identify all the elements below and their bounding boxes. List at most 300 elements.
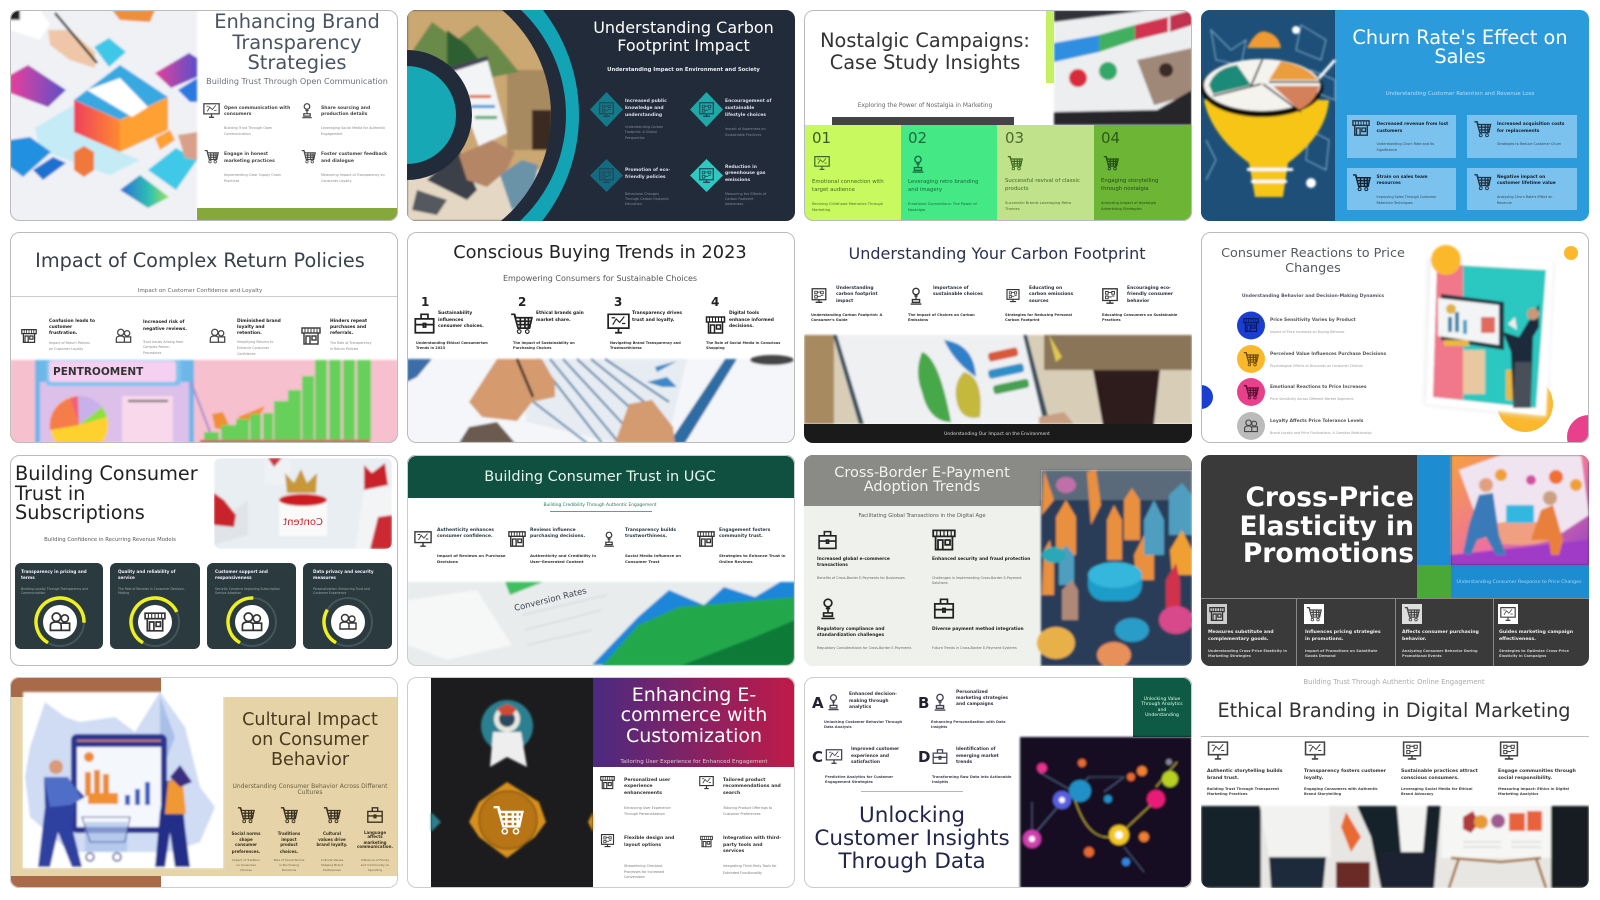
card: data privacy: Data privacy and security [313,569,374,574]
item B: marketing strategies [956,695,1008,701]
item: authenticity: consumer confidence. [437,533,493,539]
item: cultural values: Cultural [323,831,341,836]
item: tailored [700,776,781,816]
item: eco behaviour: behavior [1127,298,1150,304]
item: personalized: experience [624,783,653,789]
item: cultural values: Preferences [323,868,341,872]
title: Trust in [14,482,85,505]
image: neon data network [1020,737,1192,888]
item: sourcing: Engagement [321,132,343,136]
card: decreased revenue: Decreased revenue from lost [1376,122,1448,127]
item: regulatory: Regulatory Considerations for Cross-Border E-Payments [817,646,912,650]
panel: Churn Rate's Effect on Sales [1201,10,1589,221]
column 04 [1094,125,1192,221]
item: sustainable choices: Emissions [908,318,928,322]
column 02: Leveraging retro branding [908,179,978,185]
item: lifestyle: Encouragement of [725,99,771,104]
item: flexible [602,834,674,879]
column: campaign effectiveness: Elasticity in Campaigns [1499,654,1546,658]
title: Behavior [271,750,350,770]
item: sensitivity: Impact of Price Increases on Buying Behavior [1270,330,1345,334]
item 4: decisions. [729,323,754,329]
item: storytelling: Marketing Practices [1207,792,1247,796]
item 1: Sustainability [438,311,472,316]
card: lifetime value: Revenue [1497,201,1512,205]
card: support [207,563,296,655]
item C: Improved customer [851,747,899,752]
item: e-commerce [817,532,905,580]
item: language: marketing [363,840,387,845]
photo: crown on cylinder [214,458,392,549]
item: storytelling: brand trust. [1207,775,1239,781]
illustration: shoppers at large tablet [23,692,223,868]
item: engagement: community trust. [719,533,763,539]
item: public knowledge [590,92,667,140]
item: lifestyle [690,92,772,137]
title: Through Data [837,849,986,874]
header with title: Tailoring User Experience for Enhanced Engagement [619,759,768,765]
title: Consumer Reactions to Price [1221,246,1405,261]
column: pricing strategies: Impact of Promotions on Substitute [1305,649,1377,653]
column: substitute goods: Understanding Cross-Price Elasticity in [1208,649,1287,653]
item: flexible: Flexible design and [624,836,674,841]
title: Elasticity in [1239,511,1414,542]
item D: Insights [932,780,948,784]
item B: B [918,694,929,712]
item: payment [932,599,1024,650]
item D: trends [956,759,973,765]
item: security: Challenges in Implementing Cross-Border E-Payment [932,576,1022,580]
item: flexible: Streamlining Checkout [624,864,662,868]
item: sustainable choices: sustainable choices [933,291,983,297]
title: Footprint Impact [617,36,750,55]
item 1 [415,295,488,350]
title: Understanding Your Carbon Footprint [848,244,1146,263]
item 1: 1 [421,295,429,309]
subtitle: Building Credibility Through Authentic Engagement [544,502,657,508]
item: lifestyle: sustainable [725,105,754,111]
title: Transparency [231,31,362,54]
item: transparency: Engaging Consumers with Authentic [1304,787,1378,791]
card: transparency: Transparency in pricing and [21,569,87,574]
column: substitute goods: complementary goods. [1208,636,1269,642]
item: policies: Promotion of eco- [625,168,670,173]
item: personalized: Through Personalization [623,812,665,816]
column: purchasing behaviour: behavior. [1402,636,1427,642]
column: campaign effectiveness [1498,604,1573,658]
item: carbon footprint: Consumer's Guide [811,318,848,322]
chart photo: conversion rates [407,582,795,666]
item: payment: Diverse payment method integration [932,626,1024,632]
item B: Insights [931,725,947,729]
item: engagement: Strategies to Enhance Trust in [719,553,785,558]
item: traditions: product [280,842,298,847]
item: emissions: Awareness [725,202,743,206]
item: open communication: consumers [224,111,252,117]
chart photo: conversion rates: Conversion Rates [513,586,588,614]
item: flexible: layout options [624,842,661,848]
item C [812,746,900,784]
title: on Consumer [251,730,369,750]
item: perceived value: Perceived Value Influences Purchase Decisions [1270,351,1386,357]
item: tailored: recommendations and [723,783,781,789]
item: sustainable practices: conscious consumers. [1401,775,1459,781]
card: strain on sales [1347,168,1456,210]
header band with title [804,455,1192,506]
item: policies: Through Carbon Footprint [624,197,669,201]
item D: D [918,748,930,766]
item C: satisfaction [851,759,880,765]
title: Subscriptions [15,501,145,524]
photo: laptop in circular crop [407,10,579,221]
item: emissions sources: Educating on [1029,286,1062,291]
card: transparency [15,563,103,655]
panel: Cultural Impact on Consumer Behavior [10,677,398,888]
title: Cross-Price [1245,482,1414,513]
item: language: affects [367,834,383,839]
item: emissions sources: sources [1029,298,1049,304]
decorative circles [1189,246,1600,459]
item: sustainable practices: Brand Advocacy [1401,792,1434,796]
subtitle band: Understanding Consumer Response to Price Changes [1457,579,1582,585]
item A: Unlocking Customer Behavior Through [824,720,902,724]
item: tailored: Customer Preferences [723,812,761,816]
item: loyalty [1237,412,1372,440]
column 03: 03 [1005,129,1024,147]
panel: Understanding Your Carbon Footprint [804,232,1192,443]
item: communities: Engage communities through [1498,769,1576,774]
item: security: Enhanced security and fraud protection [932,556,1030,562]
item: eco behaviour: Encouraging eco- [1127,286,1171,291]
column: purchasing behaviour [1402,604,1479,658]
item: e-commerce: Increased global e-commerce [817,557,890,562]
title: Churn Rate's Effect on [1352,26,1568,49]
item: security: Solutions [932,581,948,585]
photo: business team at whiteboard [1201,806,1589,888]
header with title: Enhancing E- [632,684,756,706]
item: e-commerce: Benefits of Cross-Border E-Payments for Businesses [817,576,905,580]
item: authenticity: Impact of Reviews on Purchase [437,553,506,558]
item: emissions sources [1005,285,1073,322]
subtitle: Building Confidence in Recurring Revenue Models [44,537,176,543]
column: pricing strategies [1304,604,1381,658]
title: Promotions [1243,538,1414,569]
item 2: 2 [518,295,526,309]
item: communities [1498,742,1576,796]
item: eco behaviour: Practices [1102,318,1121,322]
green callout: Unlocking Value [1144,697,1180,702]
item: negative reviews: Increased risk of [143,320,184,325]
card: support: Customer support and [215,569,268,574]
item: flexible: Conversions [624,875,645,879]
item: sustainable choices [908,285,983,322]
panel: Nostalgic Campaigns [804,10,1192,221]
panel: Understanding Carbon Footprint Impact [407,10,795,221]
subtitle: Building Trust Through Open Communication [206,76,388,86]
item: public knowledge: Perspective [625,136,645,140]
title: Cultural Impact [242,710,378,730]
item 3 [608,295,682,350]
item: integration [701,835,781,875]
item D: Transforming Raw Data into Actionable [932,775,1011,779]
item: negative reviews: Trust Issues Arising from [143,340,183,344]
column 03 [997,125,1094,221]
card: data privacy: Personalization: Enhancing Trust and [313,587,370,591]
item: emissions sources: carbon emissions [1029,291,1073,297]
title: Changes [1285,261,1341,276]
item: reviews: Authenticity and Credibility in [530,553,596,558]
item: integration: Integrating Third-Party Tools for [723,864,777,868]
photo: social media metrics [1054,10,1192,125]
header with title: Customization [626,725,762,747]
item: brand loyalty: Diminished brand [237,319,281,324]
title: Case Study Insights [830,51,1020,74]
card: quality: Quality and reliability of [118,569,175,574]
title: Customer Insights [814,826,1010,851]
item: repeat purchases: Hinders repeat [330,319,367,324]
item: personalized: Enhancing User Experience [624,806,671,810]
column 03: Successful revival of classic [1005,178,1080,184]
item: emissions: emissions [725,177,750,183]
footer bar [804,424,1192,443]
item: feedback: Foster customer feedback [321,152,387,157]
card: strain on sales: resources [1376,180,1401,186]
item: storytelling [1207,742,1283,796]
photo: crown on cylinder: Content [283,517,323,528]
column 03: Themes [1004,207,1020,211]
item B: and campaigns [956,701,994,707]
column: substitute goods: Measures substitute and [1208,630,1274,635]
image: coloured chart pieces [1037,470,1193,668]
subtitle: Understanding Impact on Environment and Society [607,67,760,73]
item 1: influences [438,317,464,323]
item: perceived value: Psychological Effects of Discounts on Consumer Choices [1270,364,1363,368]
illustration: yellow funnel with pie chart [1201,25,1335,197]
item: tailored: search [723,790,740,796]
item: social norms [232,808,261,872]
item 3: Trustworthiness [610,346,642,350]
item: engagement: Online Reviews [719,559,753,564]
item: confusion [22,318,95,351]
item 1: consumer choices. [438,323,484,329]
item: sensitivity: Price Sensitivity Varies by Product [1270,317,1356,323]
subtitle: Empowering Consumers for Sustainable Choices [503,274,697,283]
photo: hands on paper document [407,355,795,443]
column 01 [804,125,901,221]
column: substitute goods [1207,604,1287,658]
header band with title: Cross-Border E-Payment [834,465,1010,481]
item C: experience and [851,753,889,759]
card: support: Security Concerns Impacting Subscription [215,587,280,591]
item: social norms: Choices [240,868,252,872]
card: lifetime value: Analyzing Churn Rate's Effect on [1497,195,1552,199]
item: carbon footprint: impact [836,298,854,304]
card: strain on sales: Improving Sales Through Customer [1376,195,1436,199]
item: communities: Marketing Analytics [1498,792,1538,796]
column: purchasing behaviour: Affects consumer purchasing [1402,630,1479,635]
card: quality [110,563,200,655]
panel: Enhancing Brand Transparency Strategies [10,10,398,221]
item: transparency: Transparency fosters customer [1304,769,1386,774]
item: perceived value [1237,345,1386,373]
panel: Building Consumer Trust in UGC [407,455,795,666]
column 02 [901,125,997,221]
item: honest marketing [205,150,281,183]
item: sensitivity [1237,312,1356,340]
item B [918,689,1008,729]
column: campaign effectiveness: effectiveness. [1499,636,1536,642]
item: confusion: Confusion leads to [49,319,95,324]
illustration: isometric colourful box [10,10,197,221]
column: pricing strategies: in promotions. [1305,636,1344,642]
card: transparency: terms [21,575,35,580]
item: reviews: Reviews influence [530,528,576,533]
item: authenticity: Decisions [437,559,459,564]
item: confusion: frustration. [49,330,78,336]
card: data privacy: measures [313,575,336,580]
item 3: 3 [614,295,622,309]
item: social norms: Impact of Tradition [232,858,260,862]
item: integration: Integration with third- [723,836,781,841]
item: feedback: and dialogue [321,158,354,164]
item: storytelling: Authentic storytelling builds [1207,769,1283,774]
item: sustainable practices: Sustainable practices attract [1401,769,1478,774]
item A: making through [849,698,889,704]
item: feedback: Consumer Loyalty [321,179,352,183]
item 4 [706,295,780,350]
item: honest marketing: Implementing Clear Supply Chain [224,173,281,177]
item: confusion: on Customer Loyalty [49,347,83,351]
item: transparency: loyalty. [1304,775,1324,781]
card: support: Service Adoption [215,591,241,595]
illustration: two people at table [1451,455,1589,565]
column 02: 02 [908,129,927,147]
panel: Cross-Border E-Payment Adoption Trends [804,455,1193,668]
item: personalized: Personalized user [624,778,670,783]
column 01: Emotional connection with [812,179,884,185]
title: Enhancing Brand [214,10,380,33]
card: acquisition costs [1467,115,1577,158]
item A: analytics [849,704,872,710]
column 04: Analyzing Impact of Nostalgia [1101,201,1156,205]
item: transparency: Social Media Influence on [625,553,681,558]
item 4: Shopping [706,346,725,350]
item B: Enhancing Personalization with Data [931,720,1006,724]
subtitle: Facilitating Global Transactions in the Digital Age [858,513,986,519]
photo: tablet with leaf chart and cup [804,335,1192,431]
item: emotional: Emotional Reactions to Price Increases [1270,384,1367,390]
item: traditions: in Purchasing [279,863,299,867]
panel: Ethical Branding in Digital Marketing [1201,677,1589,888]
card: decreased revenue: Understanding Churn Rate and Its [1376,142,1434,146]
item: repeat purchases: purchases and [330,324,366,330]
item: eco behaviour: Educating Consumers on Sustainable [1102,313,1177,317]
subtitle band [1451,565,1589,598]
column: substitute goods: Marketing Strategies [1208,654,1251,658]
column: pricing strategies: Influences pricing strategies [1305,630,1381,635]
item 4: The Role of Social Media in Conscious [706,341,780,345]
item 2: The Impact of Sustainability on [513,341,575,345]
item: feedback [302,150,388,183]
green callout: and [1158,707,1166,713]
item: negative reviews: negative reviews. [143,326,187,332]
footer bar: Understanding Our Impact on the Environment [944,431,1050,437]
item 1: Trends in 2023 [416,346,446,350]
item: sustainable choices: The Impact of Choices on Carbon [908,313,975,317]
item: language: Language [364,830,386,835]
item: social norms: Social norms [232,831,260,836]
item: personalized: enhancements [624,790,662,796]
title: Ethical Branding in Digital Marketing [1217,699,1571,722]
item D: Identification of [956,747,996,752]
item: traditions: choices. [280,849,299,854]
item C: Engagement Strategies [825,780,873,784]
item: public knowledge: Increased public [625,99,667,104]
item: emissions sources: Strategies for Reducing Personal [1005,313,1072,317]
item: confusion: Impact of Return Policies [49,341,90,345]
item: policies [590,159,670,206]
item: social norms: preferences. [232,849,261,854]
header band with title: Building Consumer Trust in UGC [484,469,716,485]
item D [918,746,1012,784]
item: open communication: Building Trust Through Open [224,126,272,130]
card: quality: The Role of Reviews in Consumer Decision- [118,587,185,591]
item: regulatory: Regulatory compliance and [817,627,885,632]
item: carbon footprint [811,285,882,322]
card: lifetime value: customer lifetime value [1497,180,1556,186]
item: sustainable practices: Leveraging Social Media for Ethical [1401,787,1473,791]
item: social norms: on Consumer [236,863,257,867]
item: traditions: Role of Social Norms [274,858,304,862]
title: Strategies [247,51,347,74]
item: integration: party tools and [723,842,763,848]
item: policies: friendly policies [625,174,666,180]
item: eco behaviour: friendly consumer [1127,291,1174,297]
header band with title [407,455,795,498]
item: reviews [509,527,596,564]
item: repeat purchases: referrals. [330,330,353,336]
item: emissions: Measuring the Effects of [725,192,766,196]
item: cultural values [316,808,348,872]
item: eco behaviour [1102,285,1178,322]
item: language: and Community on [361,863,389,867]
item 3: Transparency drives [632,311,682,316]
item: regulatory: standardization challenges [817,632,884,638]
item: carbon footprint: carbon footprint [836,291,878,297]
item: public knowledge: Understanding Carbon [625,125,663,129]
item: communities: social responsibility. [1498,775,1552,781]
subtitle: Cultures [298,789,322,796]
column: pricing strategies: Goods Demand [1305,654,1336,658]
item: open communication: Open communication with [224,106,290,111]
column: campaign effectiveness: Guides marketing campaign [1499,630,1573,635]
column: purchasing behaviour: Analyzing Consumer Behavior During [1402,649,1478,653]
card: lifetime value: Negative impact on [1497,175,1545,180]
column 01: target audience [812,187,855,193]
column 02: Emotional Connections: The Power of [908,202,977,206]
card: decreased revenue [1347,115,1456,158]
item: social norms: consumer [235,842,257,847]
item: open communication: Communication [224,132,251,136]
item: loyalty: Loyalty Affects Price Tolerance Levels [1270,418,1364,424]
item: honest marketing: marketing practices [224,158,275,164]
column 04: Advertising Strategies [1101,207,1142,211]
item: e-commerce: transactions [817,562,848,568]
header with title [593,677,795,767]
column: campaign effectiveness: Strategies to Optimize Cross-Price [1499,649,1569,653]
column 04: 04 [1101,129,1120,147]
image label: PENTROOMENT [53,366,144,378]
